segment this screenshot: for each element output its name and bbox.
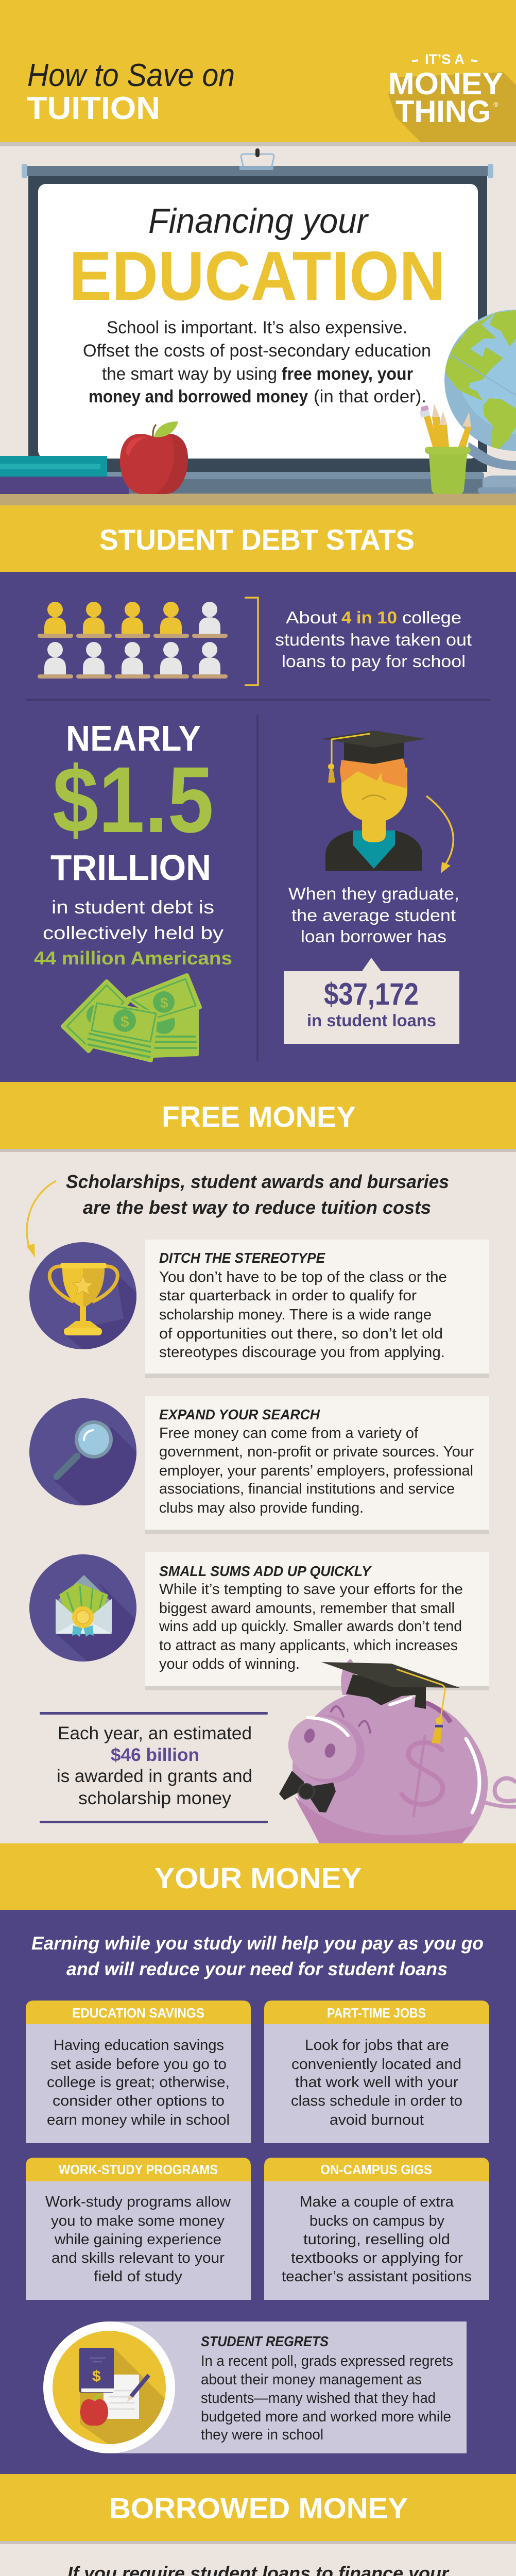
free money intro: [66, 1171, 449, 1218]
card: small sums add up quickly: biggest award amounts, remember that small: [159, 1600, 455, 1617]
screen intro text: [83, 318, 431, 406]
arrow: graduate to debt: [426, 796, 453, 873]
card: education savings: set aside before you go to: [50, 2056, 227, 2073]
logo: It's a Money Thing: IT’S A: [425, 52, 465, 67]
card: student regrets: they were in school: [201, 2427, 323, 2443]
card: ditch the stereotype: stereotypes discourage you from applying.: [159, 1344, 445, 1361]
callout: average debt: [284, 958, 459, 1044]
icon: unhappy graduate: [322, 731, 426, 871]
screen heading: EDUCATION: [69, 237, 445, 315]
icon: book, paper and apple: [43, 2321, 175, 2453]
icon: magnifying glass: [29, 1398, 136, 1505]
card: work-study programs: [26, 2158, 251, 2300]
your money intro: [31, 1933, 484, 1979]
card: ditch the stereotype: star quarterback in order to qualify for: [159, 1287, 417, 1304]
card: student regrets: STUDENT REGRETS: [201, 2333, 329, 2349]
bracket: [245, 598, 258, 685]
card: on-campus gigs: [264, 2158, 489, 2300]
card: small sums add up quickly: While it’s tempting to save your efforts for the: [159, 1581, 463, 1598]
stat: 4 in 10: college: [402, 608, 461, 627]
callout: average debt: in student loans: [307, 1011, 436, 1030]
stat: $46 billion: [40, 1712, 268, 1823]
card: on-campus gigs: Make a couple of extra: [300, 2194, 454, 2210]
stat: $1.5 trillion: [34, 718, 232, 969]
free money intro: Scholarships, student awards and bursaries: [66, 1171, 449, 1192]
card: expand your search: clubs may also provide funding.: [159, 1500, 364, 1516]
section header: free money: [0, 1082, 516, 1152]
stat: $46 billion: is awarded in grants and: [57, 1766, 252, 1786]
card: student regrets: students—many wished that they had: [201, 2390, 436, 2406]
section header: borrowed money: BORROWED MONEY: [109, 2492, 408, 2525]
icon: ten students: [38, 602, 228, 679]
screen intro text: the smart way by using: [102, 364, 277, 384]
logo: It's a Money Thing: THING: [395, 94, 491, 129]
screen intro text: School is important. It’s also expensive.: [107, 318, 407, 337]
card: work-study programs: field of study: [94, 2268, 183, 2285]
card: education savings: [26, 2001, 251, 2143]
card: student regrets: [112, 2321, 467, 2453]
card: expand your search: EXPAND YOUR SEARCH: [159, 1406, 320, 1422]
card: student regrets: budgeted more and worked more while: [201, 2409, 451, 2425]
stat: $1.5 trillion: collectively held by: [43, 922, 223, 943]
icon: book, paper and apple: $: [92, 2368, 101, 2385]
stat: $1.5 trillion: TRILLION: [50, 848, 211, 888]
card: expand your search: associations, financial institutions and service: [159, 1481, 455, 1497]
icon: stack of money: [63, 975, 200, 1060]
card: expand your search: employer, your parents’ employers, professional: [159, 1463, 473, 1479]
card: work-study programs: Work-study programs allow: [45, 2194, 231, 2210]
card: student regrets: In a recent poll, grads expressed regrets: [201, 2353, 453, 2369]
card: small sums add up quickly: [145, 1552, 489, 1690]
icon: stack of money: $: [121, 1013, 129, 1030]
icon: pencil cup: [419, 403, 471, 494]
stat: average borrower: [288, 884, 459, 946]
card: expand your search: government, non-profit or private sources. Your: [159, 1444, 474, 1460]
card: work-study programs: while gaining experience: [54, 2231, 221, 2248]
stat: average borrower: the average student: [291, 906, 456, 925]
card: ditch the stereotype: of opportunities out there, so don’t let old: [159, 1326, 443, 1342]
icon: envelope with money: [29, 1554, 136, 1662]
icon: globe: [444, 291, 516, 494]
card: education savings: college is great; otherwise,: [47, 2074, 230, 2091]
card: education savings: Having education savings: [54, 2037, 224, 2054]
arrow: intro to tips: [26, 1181, 56, 1258]
card: part-time jobs: class schedule in order to: [291, 2093, 462, 2109]
callout: average debt: $37,172: [324, 977, 419, 1011]
page title: [27, 58, 235, 126]
screen heading: Financing your: [148, 201, 369, 241]
card: ditch the stereotype: scholarship money. There is a wide range: [159, 1307, 432, 1323]
projector screen: [22, 148, 493, 472]
header band: [0, 0, 516, 146]
card: small sums add up quickly: your odds of winning.: [159, 1656, 300, 1672]
section header: your money: [0, 1843, 516, 1910]
logo: It's a Money Thing: [388, 52, 516, 142]
screen intro text: money and borrowed money: [89, 387, 308, 406]
icon: trophy: [29, 1242, 136, 1349]
free money intro: are the best way to reduce tuition costs: [83, 1197, 431, 1218]
screen intro text: Offset the costs of post-secondary education: [83, 341, 431, 361]
card: part-time jobs: Look for jobs that are: [305, 2037, 449, 2054]
logo: It's a Money Thing: ®: [493, 100, 498, 108]
screen intro text: (in that order).: [314, 387, 426, 406]
card: education savings: EDUCATION SAVINGS: [72, 2005, 204, 2021]
card: on-campus gigs: bucks on campus by: [309, 2213, 444, 2229]
section header: your money: YOUR MONEY: [154, 1862, 362, 1895]
section header: borrowed money: [0, 2474, 516, 2544]
card: on-campus gigs: ON-CAMPUS GIGS: [320, 2162, 432, 2177]
your money intro: and will reduce your need for student loans: [66, 1958, 448, 1979]
stat: $1.5 trillion: 44 million Americans: [34, 947, 232, 969]
stat: $1.5 trillion: NEARLY: [66, 718, 201, 758]
icon: stack of money: $: [160, 995, 168, 1011]
screen intro text: free money, your: [282, 364, 413, 384]
icon: piggy bank with graduation cap: [279, 1659, 516, 1843]
stat: $46 billion: scholarship money: [78, 1788, 232, 1808]
card: part-time jobs: that work well with your: [295, 2074, 458, 2091]
icon: books: [0, 456, 129, 494]
section header: free money: FREE MONEY: [162, 1100, 356, 1133]
card: work-study programs: WORK-STUDY PROGRAMS: [59, 2162, 218, 2177]
card: work-study programs: and skills relevant to your: [51, 2250, 225, 2266]
card: student regrets: about their money management as: [201, 2371, 422, 2388]
card: expand your search: [145, 1396, 489, 1534]
stat: $1.5 trillion: in student debt is: [51, 896, 214, 918]
icon: apple: [120, 421, 188, 494]
section header: student debt stats: STUDENT DEBT STATS: [99, 523, 415, 556]
section header: student debt stats: [0, 505, 516, 572]
card: part-time jobs: avoid burnout: [330, 2112, 424, 2128]
stat: $46 billion: $46 billion: [111, 1745, 199, 1765]
panel: student debt stats: [0, 572, 516, 1082]
stat: 4 in 10: students have taken out: [275, 630, 472, 649]
card: small sums add up quickly: to attract as many applicants, which increases: [159, 1637, 458, 1654]
stat: 4 in 10: [275, 608, 472, 671]
card: work-study programs: you to make some money: [51, 2213, 225, 2229]
screen heading: [69, 201, 445, 315]
page title: TUITION: [27, 91, 160, 126]
card: on-campus gigs: teacher’s assistant positions: [282, 2268, 472, 2285]
stat: $1.5 trillion: $1.5: [53, 747, 214, 852]
card: ditch the stereotype: DITCH THE STEREOTYPE: [159, 1250, 325, 1266]
panel: your money: [0, 1910, 516, 2475]
card: expand your search: Free money can come from a variety of: [159, 1425, 419, 1442]
card: education savings: earn money while in school: [47, 2112, 230, 2128]
card: small sums add up quickly: wins add up quickly. Smaller awards don’t tend: [159, 1618, 462, 1635]
card: part-time jobs: conveniently located and: [291, 2056, 461, 2073]
card: small sums add up quickly: SMALL SUMS ADD UP QUICKLY: [159, 1563, 372, 1579]
stat: average borrower: loan borrower has: [301, 927, 446, 946]
card: part-time jobs: PART-TIME JOBS: [327, 2005, 426, 2021]
stat: 4 in 10: 4 in 10: [341, 608, 397, 627]
card: education savings: consider other options to: [53, 2093, 225, 2109]
card: on-campus gigs: textbooks or applying for: [291, 2250, 463, 2266]
stat: $46 billion: Each year, an estimated: [58, 1723, 252, 1743]
card: ditch the stereotype: You don’t have to be top of the class or the: [159, 1269, 447, 1285]
logo: It's a Money Thing: MONEY: [388, 66, 503, 101]
card: on-campus gigs: tutoring, reselling old: [303, 2231, 450, 2248]
card: part-time jobs: [264, 2001, 489, 2143]
card: ditch the stereotype: [145, 1240, 489, 1378]
your money intro: Earning while you study will help you pay as you go: [31, 1933, 484, 1954]
desk: [0, 472, 516, 506]
stat: average borrower: When they graduate,: [288, 884, 459, 903]
stat: 4 in 10: About: [286, 608, 337, 627]
stat: 4 in 10: loans to pay for school: [282, 652, 466, 671]
page title: How to Save on: [27, 58, 235, 93]
